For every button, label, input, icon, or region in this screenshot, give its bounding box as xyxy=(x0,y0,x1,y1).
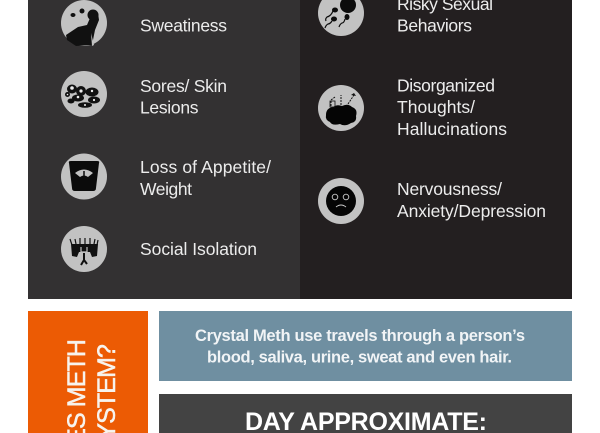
text: Risky Sexual Behaviors xyxy=(397,0,493,36)
panel: orange side heading xyxy=(28,311,148,433)
text: callout copy xyxy=(195,327,525,366)
text: Loss of Appetite/ Weight: Loss of Appetite/ xyxy=(140,157,271,177)
text: callout copy: Crystal Meth use travels through a person’s xyxy=(195,327,525,345)
panel: dark detection heading xyxy=(159,394,572,433)
icon: person isolated from crowd xyxy=(61,226,107,272)
text: Loss of Appetite/ Weight xyxy=(140,157,271,199)
text: Disorganized Thoughts/ Hallucinations: Hallucinations xyxy=(397,119,507,139)
text: Nervousness/ Anxiety/Depression: Nervousness/ xyxy=(397,179,502,199)
text: Disorganized Thoughts/ Hallucinations: Disorganized xyxy=(397,76,495,96)
icon: skin sores xyxy=(61,71,107,117)
text: callout copy: blood, saliva, urine, sweat and even hair. xyxy=(207,348,512,366)
text: Sores/ Skin Lesions: Lesions xyxy=(140,98,199,118)
text: Disorganized Thoughts/ Hallucinations xyxy=(397,76,507,139)
text: Loss of Appetite/ Weight: Weight xyxy=(140,179,192,199)
text: Risky Sexual Behaviors: Behaviors xyxy=(397,16,472,36)
text: Sores/ Skin Lesions xyxy=(140,76,227,118)
text: Nervousness/ Anxiety/Depression xyxy=(397,179,546,221)
panel: blue callout xyxy=(159,311,572,381)
panel: right symptoms column xyxy=(300,0,572,299)
text: Nervousness/ Anxiety/Depression: Anxiety/Depression xyxy=(397,201,546,221)
icon: sperm and egg xyxy=(318,0,364,36)
text: Disorganized Thoughts/ Hallucinations: Thoughts/ xyxy=(397,97,475,117)
text: Social Isolation: Social Isolation xyxy=(140,239,257,259)
icon: worried face xyxy=(318,178,364,224)
icon: weight scale xyxy=(61,154,107,200)
panel: left symptoms column xyxy=(28,0,300,299)
icon: disorganized thoughts brain xyxy=(318,85,364,131)
text: Sweatiness: Sweatiness xyxy=(140,16,227,36)
heading: rotated text xyxy=(63,340,121,433)
icon: sweating person xyxy=(61,0,107,46)
text: Sores/ Skin Lesions: Sores/ Skin xyxy=(140,76,227,96)
